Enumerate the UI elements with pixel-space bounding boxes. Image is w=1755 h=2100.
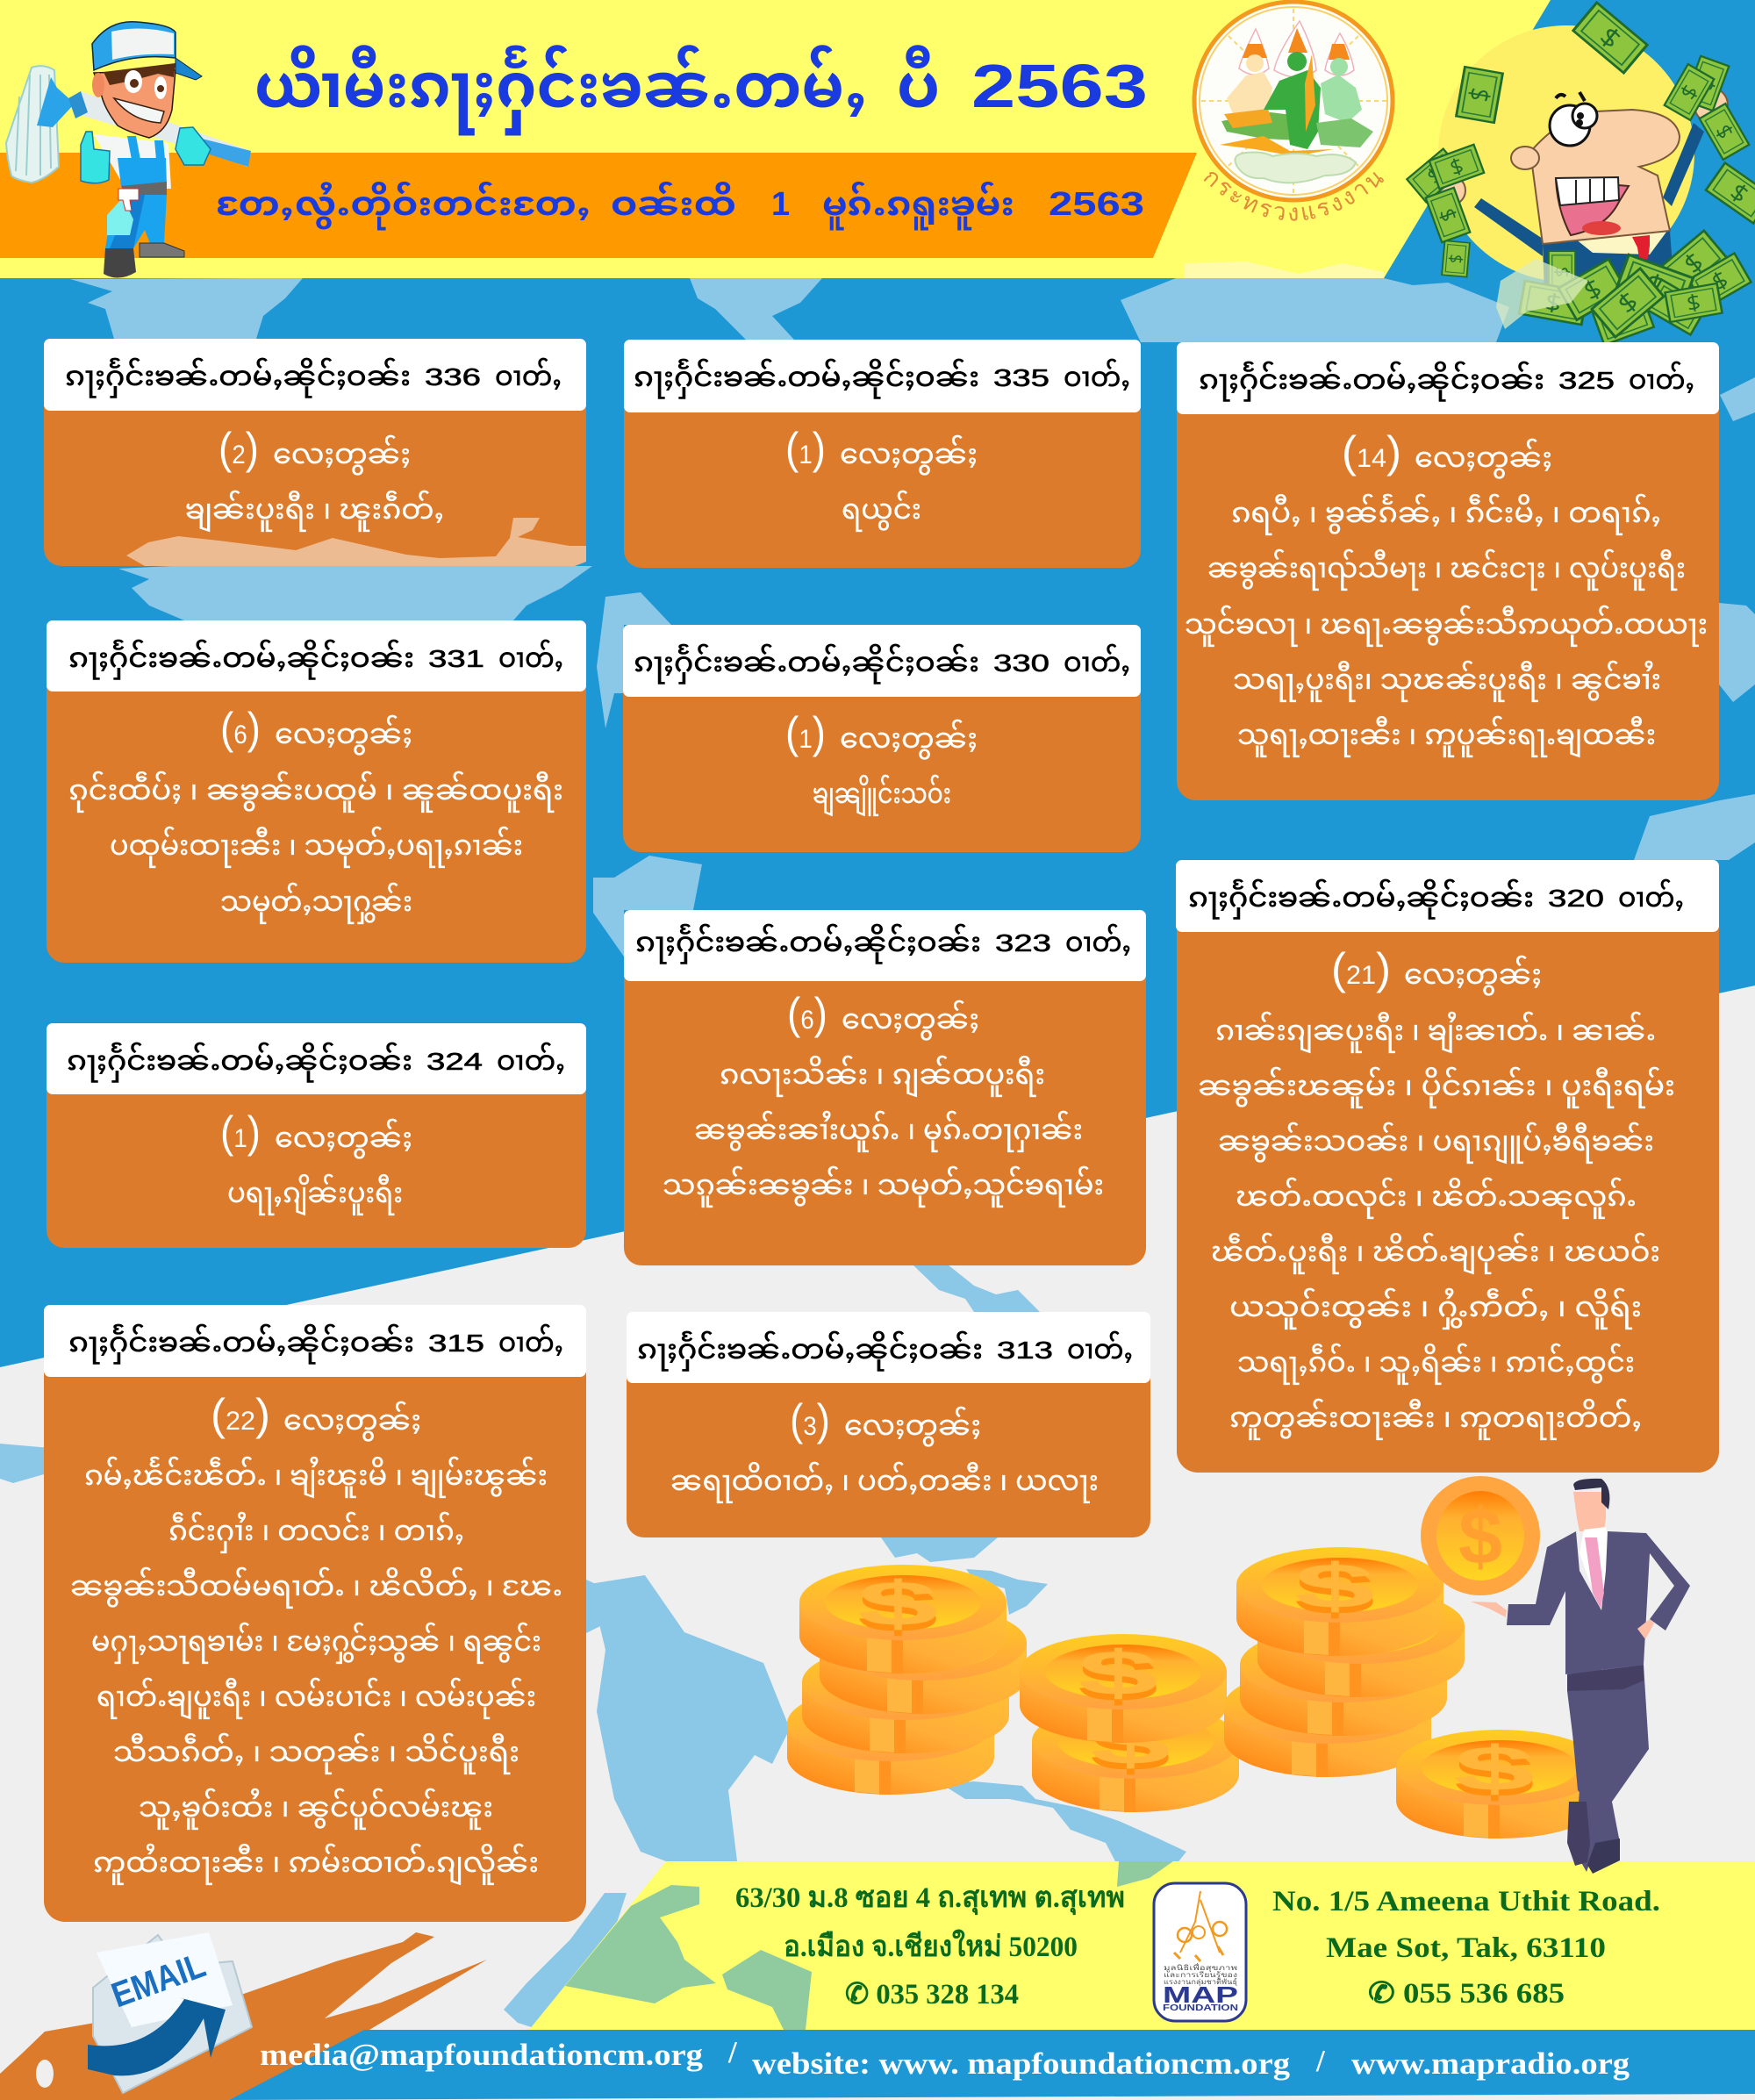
logo: MAP Foundation — [1154, 1883, 1246, 2021]
address: Mae Sot office — [1272, 1886, 1660, 2010]
address: Thailand office: ✆ 035 328 134 — [845, 1979, 1019, 2010]
panel: wage 315: ၵဵင်းႁၢႆး ၊ တလင်း ၊ တၢၵ်ႇ — [168, 1510, 464, 1553]
hands — [1430, 88, 1728, 206]
panel: wage 313: ၵႃႈႁႅင်းၶၼ်ႉတမ်ႇၼိုင်ႈဝၼ်း — [637, 1330, 983, 1372]
logo: MAP Foundation: FOUNDATION — [1163, 2003, 1238, 2013]
footer contact line: website: www. mapfoundationcm.org — [752, 2046, 1291, 2081]
panel: wage 331: ဝၢတ်ႇ — [498, 639, 563, 673]
coin stack 3: $ — [1294, 1557, 1375, 1628]
panel: wage 331: သမုတ်ႇသႃႁွၼ်း — [220, 881, 412, 924]
panel: wage 331: 331 — [428, 645, 484, 672]
panel: wage 325: (14) — [1342, 427, 1401, 477]
suit body — [1474, 123, 1704, 294]
panel: wage 325 — [1177, 342, 1719, 800]
panel: wage 315: 315 — [428, 1330, 484, 1357]
icon: email envelope: EMAIL — [106, 1946, 211, 2015]
title — [254, 45, 1148, 136]
logo: MAP Foundation: มูลนิธิเพื่อสุขภาพ — [1164, 1962, 1237, 1973]
icon: email envelope — [88, 1932, 252, 2093]
panel: wage 323: သၵူၼ်းၼၶွၼ်း ၊ သမုတ်ႇသူင်ၶရၢမ်း — [663, 1165, 1104, 1208]
panel: wage 324: ပရႃႇၵျိၼ်းပူးရီး — [227, 1172, 403, 1215]
panel: wage 313: ဝၢတ်ႇ — [1067, 1330, 1133, 1365]
icon: ministry of labour seal — [1192, 0, 1395, 221]
panel: wage 313: ၼရႃထိဝၢတ်ႇ ၊ ပတ်ႇတၼီး ၊ ယလႃး — [670, 1460, 1099, 1503]
panel: wage 315 — [44, 1305, 586, 1922]
panel: wage 325: ဝၢတ်ႇ — [1629, 361, 1694, 395]
panel: wage 324: ၵႃႈႁႅင်းၶၼ်ႉတမ်ႇၼိုင်ႈဝၼ်း — [67, 1042, 412, 1083]
subtitle: ဝၼ်းထိ — [611, 181, 736, 223]
subtitle — [216, 181, 1144, 231]
panel: wage 335: 335 — [993, 364, 1049, 391]
panel: wage 336: ဝၢတ်ႇ — [495, 357, 562, 391]
address: Mae Sot office: Mae Sot, Tak, 63110 — [1326, 1932, 1606, 1964]
coin stack 3: $ — [1294, 1551, 1375, 1622]
panel: wage 330: လေႈတွၼ်ႈ — [840, 718, 978, 760]
panel: wage 323: ၼၶွၼ်းၼၢႆးယူၵ်ႉ ၊ မုၵ်ႉတႃႁၢၼ်း — [694, 1109, 1083, 1152]
panel: wage 315: (22) — [211, 1390, 270, 1439]
footer contact line: www.mapradio.org — [1351, 2046, 1630, 2081]
footer contact line: media@mapfoundationcm.org — [260, 2038, 704, 2072]
panel: wage 320 — [1176, 860, 1719, 1473]
panel: wage 324: (1) — [220, 1107, 261, 1157]
single coin: $ — [1454, 1739, 1535, 1810]
coin stack 1: $ — [857, 1568, 938, 1639]
floating coin — [1421, 1476, 1540, 1595]
panel: wage 331: လေႈတွၼ်ႈ — [275, 713, 412, 756]
panel: wage 335: လေႈတွၼ်ႈ — [840, 434, 978, 476]
subtitle: 2563 — [1049, 186, 1144, 223]
panel: wage 320: ယသူဝ်းထွၼ်း ၊ ႁွႆႉဢဵတ်ႇ ၊ လိူရ်း — [1229, 1287, 1642, 1330]
panel: wage 336: 336 — [425, 363, 481, 391]
panel: wage 324 — [47, 1023, 586, 1248]
panel: wage 320: ၵႃႈႁႅင်းၶၼ်ႉတမ်ႇၼိုင်ႈဝၼ်း — [1188, 878, 1534, 920]
panel: wage 325: သူရႃႇထႃးၼီး ၊ ဢူပူၼ်းရႃႉၶျထၼီး — [1237, 714, 1656, 757]
panel: wage 315: သူႇၶူဝ်းထႆး ၊ ၼွင်ပူဝ်လမ်းၽူး — [139, 1787, 493, 1830]
panel: wage 315: ဢူထႆးထႃးၼီး ၊ ဢမ်းထၢတ်ႉၵျလိူၼ်း — [93, 1842, 539, 1885]
icon: cleaner with mop — [6, 22, 251, 278]
panel: wage 323 — [624, 910, 1146, 1265]
panel: wage 336: လေႈတွၼ်ႈ — [273, 434, 411, 476]
footer contact line — [260, 2035, 1630, 2081]
brush dot — [36, 2060, 54, 2088]
panel: wage 325: ၵႃႈႁႅင်းၶၼ်ႉတမ်ႇၼိုင်ႈဝၼ်း — [1199, 361, 1544, 402]
address: Mae Sot office: No. 1/5 Ameena Uthit Road. — [1272, 1886, 1660, 1917]
logo: MAP Foundation: และการเรียนรู้ของ — [1164, 1971, 1237, 1980]
panel: wage 315: ၼၶွၼ်းသီထမ်မရၢတ်ႉ ၊ ၽိလိတ်ႇ ၊ ၽႄႉ — [70, 1566, 562, 1609]
floating coin: $ — [1458, 1494, 1502, 1581]
panel: wage 330 — [623, 625, 1141, 852]
panel: wage 330: (1) — [785, 708, 826, 757]
panel: wage 323: လေႈတွၼ်ႈ — [842, 999, 979, 1041]
head — [1530, 110, 1680, 244]
coin stack 2: $ — [1090, 1707, 1171, 1778]
panel: wage 315: လေႈတွၼ်ႈ — [283, 1400, 421, 1442]
panel: wage 330: ဝၢတ်ႇ — [1064, 643, 1130, 677]
panel: wage 320: 320 — [1548, 885, 1604, 912]
panel: wage 313 — [627, 1312, 1150, 1537]
panel: wage 320: ဝၢတ်ႇ — [1618, 878, 1684, 913]
money bills — [1407, 3, 1755, 345]
address: Mae Sot office: ✆ 055 536 685 — [1368, 1978, 1565, 2010]
panel: wage 313: လေႈတွၼ်ႈ — [844, 1405, 981, 1447]
panel: wage 315: ဝၢတ်ႇ — [498, 1323, 563, 1358]
panel: wage 324: လေႈတွၼ်ႈ — [275, 1117, 412, 1159]
panel: wage 320: ၼၶွၼ်းၽၼူမ်း ၊ ပိုင်ၵၢၼ်း ၊ ပူးရီးရမ်း — [1198, 1065, 1675, 1108]
coin stack 1 — [787, 1565, 1027, 1795]
footer yellow band — [529, 1861, 1755, 2030]
panel: wage 315: ရၢတ်ႉၶျပူးရီး ၊ လမ်းပၢင်း ၊ လမ်းပုၼ်း — [97, 1676, 536, 1719]
panel: wage 323: ၵလႃးသိၼ်း ၊ ၵျၼ်ထပူးရီး — [720, 1054, 1045, 1097]
panel: wage 331: ၵႃႈႁႅင်းၶၼ်ႉတမ်ႇၼိုင်ႈဝၼ်း — [68, 639, 414, 680]
coin stack 2: $ — [1078, 1638, 1158, 1709]
panel: wage 336: (2) — [218, 424, 259, 473]
panel: wage 331: ပထုမ်းထႃးၼီး ၊ သမုတ်ႇပရႃႇၵၢၼ်း — [110, 825, 523, 868]
panel: wage 315: သီသၵဵတ်ႇ ၊ သတုၼ်း ၊ သိင်ပူးရီး — [113, 1731, 519, 1774]
subtitle: တႄႇလွႆႉတိုဝ်းတင်းတႄႇ — [216, 181, 591, 231]
address: Thailand office: 63/30 ม.8 ซอย 4 ถ.สุเทพ ต.สุเทพ — [735, 1882, 1125, 1916]
coin stack 3 — [1224, 1547, 1465, 1777]
address: Thailand office — [735, 1882, 1125, 2010]
coin stack 1: $ — [857, 1574, 938, 1645]
panel: wage 320: ၽတ်ႉထလုင်း ၊ ၽိတ်ႉသၼုလူၵ်ႉ — [1236, 1176, 1637, 1219]
panel: wage 323: ၵႃႈႁႅင်းၶၼ်ႉတမ်ႇၼိုင်ႈဝၼ်း — [635, 923, 981, 964]
panel: wage 331 — [47, 620, 586, 963]
panel: wage 325: သရႃႇပူးရီး၊ သုၽၼ်းပူးရီး ၊ ၼွင်ၶၢႆး — [1233, 659, 1661, 702]
panel: wage 325: ၵရပီႇ ၊ ၶွၼ်ၵႅၼ်ႇ ၊ ၵဵင်းမိႇ ၊ တရၢၵ်ႇ — [1231, 492, 1661, 535]
title: ပီ — [897, 45, 940, 120]
orange subtitle band — [0, 153, 1197, 258]
title: ယိၢမီးၵႃႈႁႅင်းၶၼ်ႉတမ်ႇ — [254, 45, 869, 136]
panel: wage 320: လေႈတွၼ်ႈ — [1404, 954, 1542, 996]
panel: wage 320: ၵၢၼ်းၵျၼပူးရီး ၊ ၶျႆးၼၢတ်ႉ ၊ ၼၢၼ်ႉ — [1215, 1010, 1656, 1053]
single coin — [1396, 1730, 1603, 1838]
header yellow map patch — [1185, 262, 1384, 278]
panel: wage 335: ရယွင်း — [842, 489, 921, 532]
panel: wage 330: ၵႃႈႁႅင်းၶၼ်ႉတမ်ႇၼိုင်ႈဝၼ်း — [634, 643, 979, 684]
panel: wage 324: ဝၢတ်ႇ — [497, 1042, 565, 1076]
icon: cartoon businessman with money — [1407, 3, 1755, 345]
panel: wage 320: (21) — [1331, 944, 1391, 993]
panel: wage 320: ၽဵတ်ႉပူးရီး ၊ ၽိတ်ႉၶျပုၼ်း ၊ ၽယဝ်း — [1211, 1231, 1660, 1274]
footer contact line: / — [727, 2035, 738, 2069]
panel: wage 335: (1) — [785, 424, 826, 473]
panel: wage 315: မႁႃႇသႃရၶၢမ်း ၊ မႄႈႁွင်ႈသွၼ် ၊ ရၼွင်း — [91, 1621, 541, 1664]
logo: MAP Foundation: แรงงานกลุ่มชาติพันธุ์ — [1164, 1977, 1237, 1986]
subtitle: 1 — [771, 186, 790, 223]
address: Thailand office: อ.เมือง จ.เชียงใหม่ 50200 — [784, 1929, 1078, 1963]
map overlay on panel — [126, 518, 586, 566]
logo: MAP Foundation: MAP — [1163, 1982, 1238, 2008]
panel: wage 320: ၼၶွၼ်းသဝၼ်း ၊ ပရၢၵျူပ်ႇၶီရီၶၼ်း — [1218, 1121, 1654, 1164]
coin stack 2: $ — [1090, 1713, 1171, 1784]
panel: wage 320: သရႃႇၵဵဝ်ႉ ၊ သူႇရိၼ်း ၊ ဢၢင်ႇထွင်း — [1237, 1342, 1635, 1385]
title: 2563 — [971, 52, 1148, 120]
panel: wage 313: (3) — [790, 1395, 830, 1444]
panel: wage 336: ၵႃႈႁႅင်းၶၼ်ႉတမ်ႇၼိုင်ႈဝၼ်း — [65, 357, 411, 398]
icon: ministry of labour seal: กระทรวงแรงงาน — [1204, 172, 1384, 221]
panel: wage 323: 323 — [995, 929, 1051, 957]
footer contact line: / — [1315, 2044, 1326, 2078]
panel: wage 325: 325 — [1558, 367, 1615, 394]
panel: wage 323: (6) — [787, 989, 827, 1038]
single coin: $ — [1454, 1733, 1535, 1804]
panel: wage 330: ၶျၼျိူင်းသဝ်း — [813, 773, 951, 816]
panel: wage 324: 324 — [426, 1048, 483, 1075]
panel: wage 313: 313 — [997, 1337, 1053, 1364]
footer blue band — [229, 2030, 1755, 2100]
businessman figure — [1471, 1479, 1690, 1874]
coin stack 2 — [1020, 1634, 1239, 1812]
panel: wage 335: ၵႃႈႁႅင်းၶၼ်ႉတမ်ႇၼိုင်ႈဝၼ်း — [634, 358, 979, 399]
panel: wage 323: ဝၢတ်ႇ — [1065, 923, 1131, 957]
panel: wage 331: ၵုင်းထဵပ်ႈ ၊ ၼၶွၼ်းပထူမ် ၊ ၼူၼ်ထပူးရီး — [68, 770, 563, 813]
panel: wage 325: သူင်ၶလႃ ၊ ၽရႃႉၼၶွၼ်းသီဢယုတ်ႉထယႃး — [1185, 604, 1708, 647]
subtitle: မူၵ်ႉၵရူးၶူမ်း — [822, 182, 1014, 231]
panel: wage 336: ၶျၼ်းပူးရီး ၊ ၽူးၵဵတ်ႇ — [185, 489, 444, 532]
panel: wage 331: (6) — [220, 704, 261, 753]
panel: wage 325: ၼၶွၼ်းရၢၺ်သီမႃး ၊ ၽင်းငႃး ၊ လူပ်းပူးရီး — [1207, 548, 1686, 591]
panel: wage 320: ဢူတွၼ်းထႃးၼီး ၊ ဢူတရႃးတိတ်ႇ — [1229, 1397, 1642, 1440]
orange brush stroke — [0, 1932, 487, 2100]
coin stack 2: $ — [1078, 1644, 1158, 1715]
panel: wage 330: 330 — [993, 649, 1049, 677]
panel: wage 315: ၵႃႈႁႅင်းၶၼ်ႉတမ်ႇၼိုင်ႈဝၼ်း — [68, 1323, 414, 1365]
panel: wage 335: ဝၢတ်ႇ — [1064, 358, 1130, 392]
panel: wage 335 — [624, 340, 1141, 568]
panel: wage 325: လေႈတွၼ်ႈ — [1415, 437, 1552, 479]
panel: wage 315: ၵမ်ႇၽႅင်းၽဵတ်ႉ ၊ ၶျႆးၽူးမိ ၊ ၶျုမ်းၽွၼ်း — [84, 1455, 548, 1498]
panel: wage 336 — [44, 339, 586, 566]
